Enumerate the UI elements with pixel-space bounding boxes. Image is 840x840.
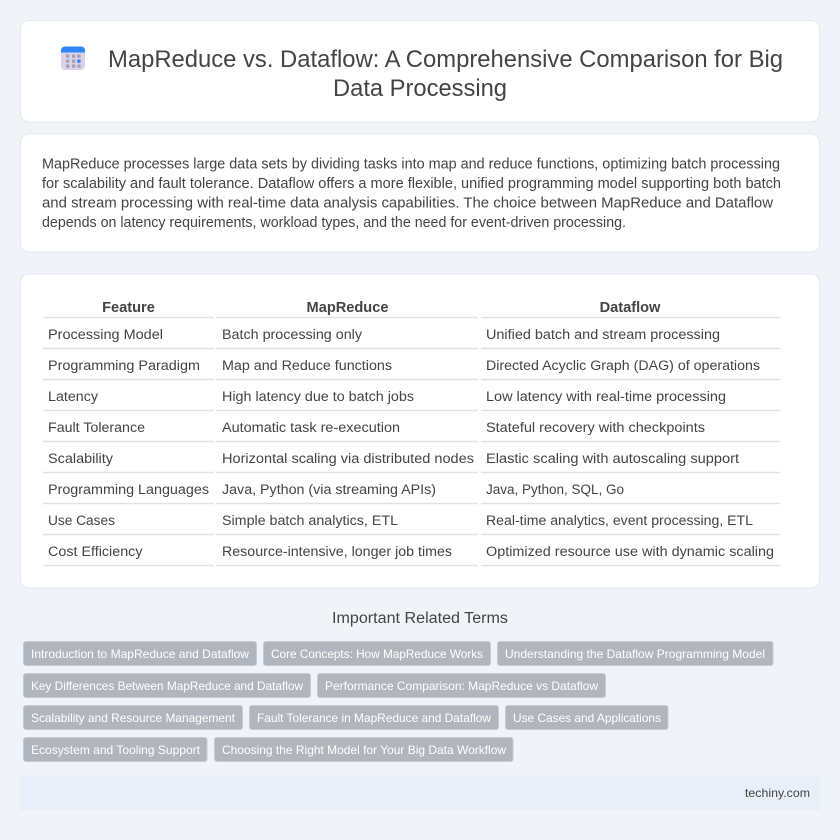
table header: Dataflow [600, 300, 661, 316]
tag [506, 706, 668, 730]
row: Fault Tolerance [48, 420, 705, 436]
tag: Introduction to MapReduce and Dataflow [31, 647, 249, 661]
row: Cost Efficiency [48, 544, 774, 560]
row: Cost Efficiency: Cost Efficiency [48, 544, 143, 560]
table header: Feature [102, 300, 155, 316]
title: Data Processing [333, 75, 507, 102]
row: Processing Model: Unified batch and stream processing [486, 327, 720, 343]
tag [24, 738, 207, 762]
panel: title header [20, 20, 820, 122]
row: Use Cases: Real-time analytics, event processing, ETL [486, 513, 753, 529]
text block: description: depends on latency requirements, workload types, and the need for event-driven processing. [42, 215, 626, 231]
tag: Fault Tolerance in MapReduce and Dataflow [257, 711, 491, 725]
row: Scalability: Scalability [48, 451, 114, 467]
row: Latency [48, 389, 726, 405]
tag: Performance Comparison: MapReduce vs Dataflow [325, 679, 598, 693]
row: Use Cases [48, 513, 753, 529]
table header: MapReduce [307, 300, 388, 316]
tag [24, 674, 310, 698]
row: Processing Model: Processing Model [48, 327, 163, 343]
row: Cost Efficiency: Optimized resource use with dynamic scaling [486, 544, 774, 560]
tag: Understanding the Dataflow Programming Model [505, 647, 765, 661]
tag [214, 738, 513, 762]
row: Use Cases: Use Cases [48, 513, 115, 529]
row: Programming Paradigm [48, 358, 760, 374]
text block: description: MapReduce processes large data sets by dividing tasks into map and reduce functions, optimizing batch processing [42, 156, 780, 172]
row: Fault Tolerance: Stateful recovery with checkpoints [486, 420, 705, 436]
tag [264, 642, 490, 666]
row: Latency: High latency due to batch jobs [222, 389, 414, 405]
tag [24, 642, 256, 666]
footer: techiny.com [745, 786, 810, 800]
tag [250, 706, 498, 730]
row: Processing Model: Batch processing only [222, 327, 363, 343]
table header [102, 300, 661, 316]
row: Scalability: Elastic scaling with autoscaling support [486, 451, 739, 467]
tag: Scalability and Resource Management [31, 711, 236, 725]
heading: related terms: Important Related Terms [332, 610, 508, 627]
tag: Choosing the Right Model for Your Big Data Workflow [222, 743, 506, 757]
table row lines [43, 318, 780, 566]
row: Programming Languages: Programming Languages [48, 482, 209, 498]
row: Programming Languages [48, 482, 624, 498]
icon: calendar [61, 46, 85, 70]
row: Programming Paradigm: Directed Acyclic Graph (DAG) of operations [486, 358, 760, 374]
row: Scalability: Horizontal scaling via distributed nodes [222, 451, 474, 467]
row: Fault Tolerance: Automatic task re-execution [222, 420, 400, 436]
text block: description: for scalability and fault tolerance. Dataflow offers a more flexible, unified programming model supporting both batch [42, 176, 781, 192]
text block: description: and stream processing with real-time data analysis capabilities. The choice between MapReduce and Dataflow [42, 196, 774, 212]
tag [498, 642, 773, 666]
title: MapReduce vs. Dataflow: A Comprehensive Comparison for Big [108, 46, 783, 73]
row: Cost Efficiency: Resource-intensive, longer job times [222, 544, 452, 560]
title [108, 46, 783, 102]
tag: Key Differences Between MapReduce and Dataflow [31, 679, 303, 693]
row: Programming Languages: Java, Python (via streaming APIs) [222, 482, 436, 498]
row: Processing Model [48, 327, 720, 343]
panel: comparison table [20, 274, 820, 588]
footer [20, 776, 820, 810]
row: Use Cases: Simple batch analytics, ETL [222, 513, 398, 529]
row: Latency: Low latency with real-time processing [486, 389, 726, 405]
row: Programming Languages: Java, Python, SQL, Go [486, 482, 624, 498]
row: Latency: Latency [48, 389, 99, 405]
tag: Ecosystem and Tooling Support [31, 743, 201, 757]
row: Fault Tolerance: Fault Tolerance [48, 420, 145, 436]
row: Scalability [48, 451, 739, 467]
tag [318, 674, 606, 698]
tag [24, 706, 242, 730]
tag: Use Cases and Applications [513, 711, 661, 725]
panel: description [20, 134, 820, 252]
tag list: related terms [24, 642, 773, 762]
row: Programming Paradigm: Map and Reduce functions [222, 358, 392, 374]
text block: description [42, 156, 781, 231]
tag: Core Concepts: How MapReduce Works [271, 647, 483, 661]
row: Programming Paradigm: Programming Paradigm [48, 358, 200, 374]
